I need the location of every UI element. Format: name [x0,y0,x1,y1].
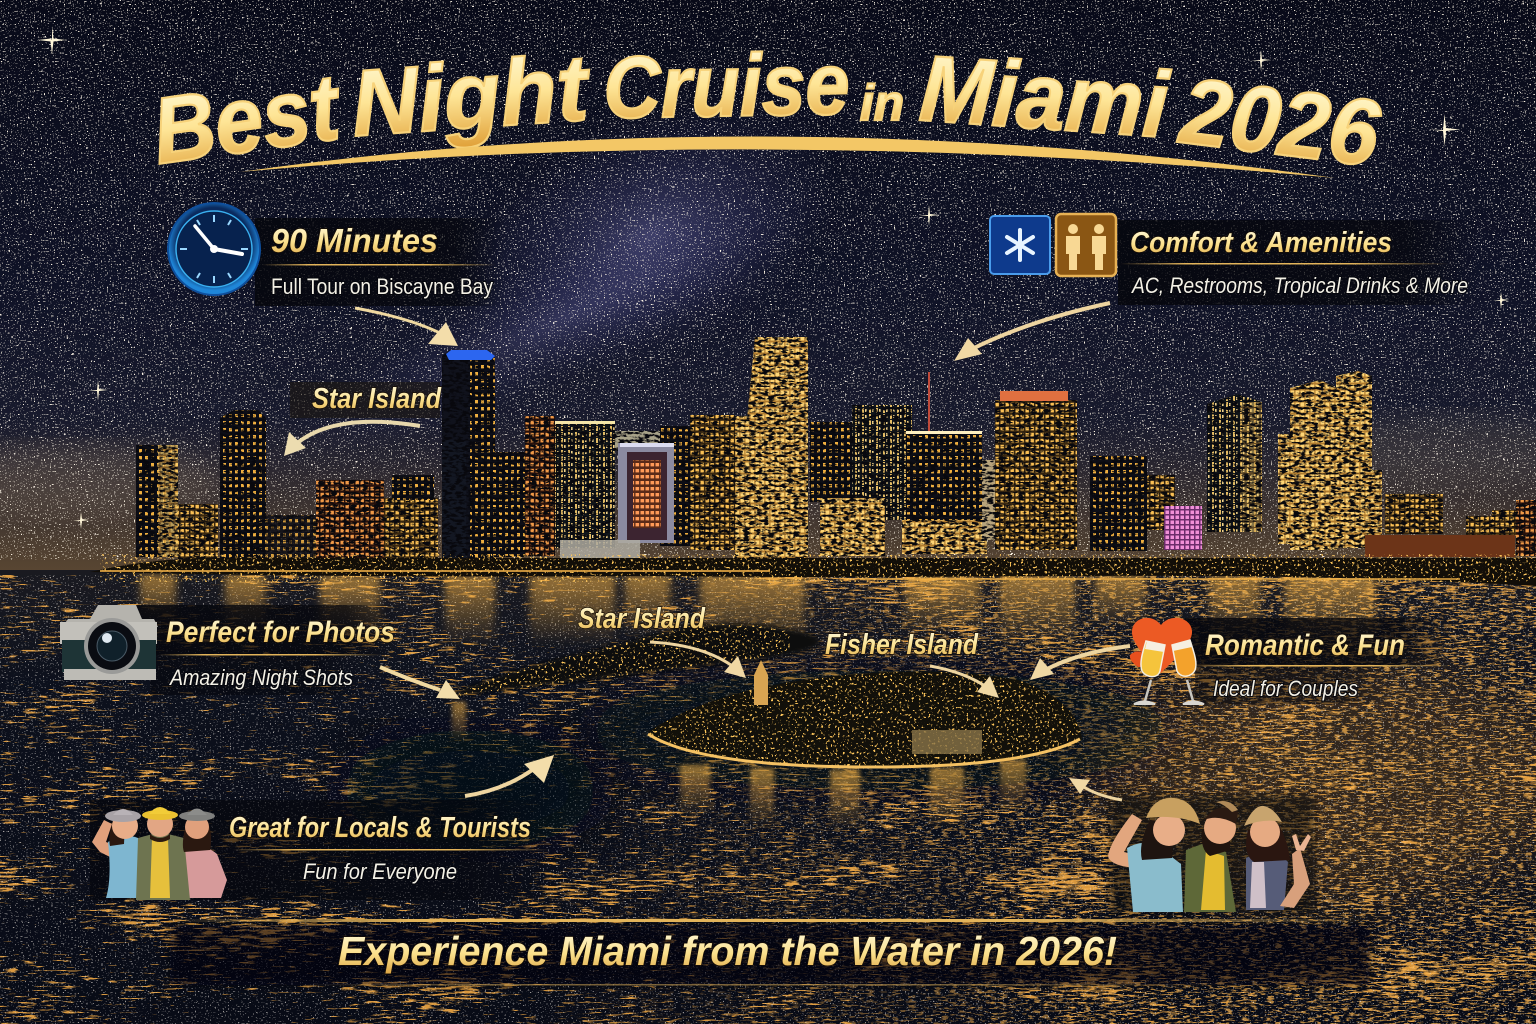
text: amenities list: AC, Restrooms, Tropical Drinks & More [1130,273,1468,298]
icon: hearts and champagne [1130,618,1204,704]
label: star island lower: Star Island [578,603,706,635]
skyline reflections [140,575,1375,650]
title swoosh [240,136,1335,178]
bottom banner [170,919,1370,986]
title: in [860,75,904,131]
heading: 90 Minutes: 90 Minutes [271,222,438,259]
title [146,34,1386,186]
callout: comfort and amenities [990,214,1478,305]
title: Cruise [603,34,850,137]
icon: camera [60,605,158,680]
fisher island landmass [648,660,1082,768]
arrow: friends to island [1069,778,1122,800]
arrow: locals to water [465,755,554,796]
icon: clock [168,203,260,295]
arrow: 90 minutes to tower [355,308,458,346]
text: amazing night shots: Amazing Night Shots [168,665,353,690]
title: 2026 [1174,57,1386,186]
heading: romantic and fun: Romantic & Fun [1205,629,1405,662]
arrow: romantic to island [1030,646,1130,680]
shoreline [90,554,1536,586]
callout: perfect for photos [60,605,400,695]
star island landmass [440,620,819,698]
sparkle stars [38,26,1509,529]
text: full tour: Full Tour on Biscayne Bay [271,274,493,299]
heading: perfect for photos: Perfect for Photos [166,616,395,649]
water [0,570,1536,1024]
text: ideal for couples: Ideal for Couples [1213,676,1358,701]
island reflections [452,702,1026,830]
arrow: fisher island [930,666,999,698]
icon: group of three friends [92,807,227,900]
city skyline [136,337,1536,566]
text: fun for everyone: Fun for Everyone [303,859,457,884]
title: Night [348,34,594,156]
heading: great for locals and tourists: Great for Locals & Tourists [229,812,531,844]
tagline: Experience Miami from the Water in 2026! [338,928,1117,974]
icon: air conditioning [990,216,1050,274]
arrow: star island to lighthouse [650,642,746,678]
label: star island upper [290,382,442,418]
skyline highlights [446,350,1515,558]
arrow: photos to island [380,667,460,699]
icon: restrooms [1056,214,1116,276]
arrow: comfort to skyline [954,303,1110,361]
title: Best [146,53,348,184]
heading: comfort and amenities: Comfort & Amenities [1130,227,1392,259]
arrow: star island to tower [284,422,420,456]
label: fisher island: Fisher Island [825,629,979,661]
callout: romantic and fun [1130,618,1455,704]
label: star island upper: Star Island [312,383,442,415]
icon: group of friends waving [1108,795,1315,913]
night sky background [0,0,1536,575]
callout: great for locals and tourists [90,800,560,900]
title: Miami [917,35,1173,157]
callout: 90 minutes [168,203,505,306]
